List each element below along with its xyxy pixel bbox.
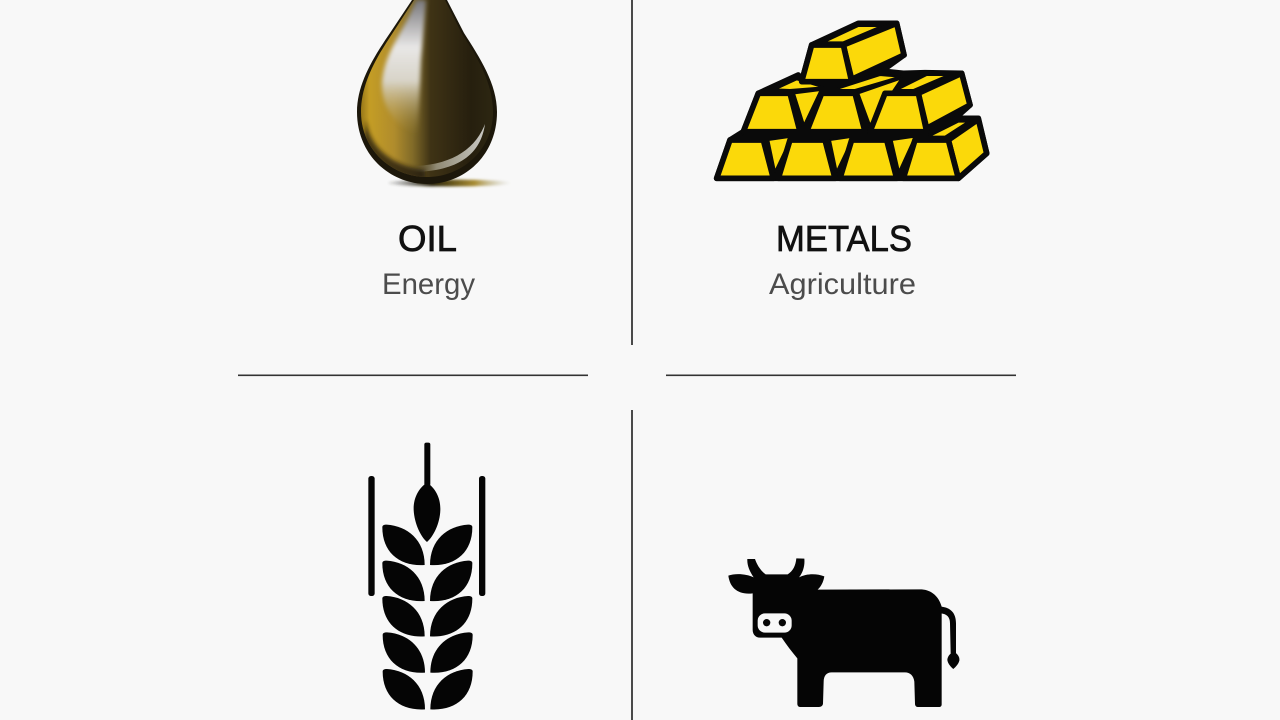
row three bars <box>717 119 987 178</box>
heading: OIL: OIL <box>398 218 457 259</box>
row two right bar <box>870 73 970 132</box>
panel: metals <box>717 23 987 301</box>
icon: cow <box>728 558 959 707</box>
infographic canvas <box>238 0 1016 720</box>
panel: grains <box>368 443 485 709</box>
row two middle bar <box>807 75 902 132</box>
panel: livestock <box>728 558 959 707</box>
heading: METALS: METALS <box>776 218 912 259</box>
label: Energy: Energy <box>382 268 475 301</box>
row two left bar <box>743 79 823 132</box>
grid dividers <box>238 0 1016 720</box>
bars silhouette <box>717 23 987 178</box>
icon: gold bars <box>717 23 987 178</box>
icon: oil drop <box>355 0 512 190</box>
top bar <box>802 23 904 82</box>
label: Agriculture: Agriculture <box>769 268 916 301</box>
icon: wheat <box>368 443 485 709</box>
panel: oil <box>355 0 512 301</box>
